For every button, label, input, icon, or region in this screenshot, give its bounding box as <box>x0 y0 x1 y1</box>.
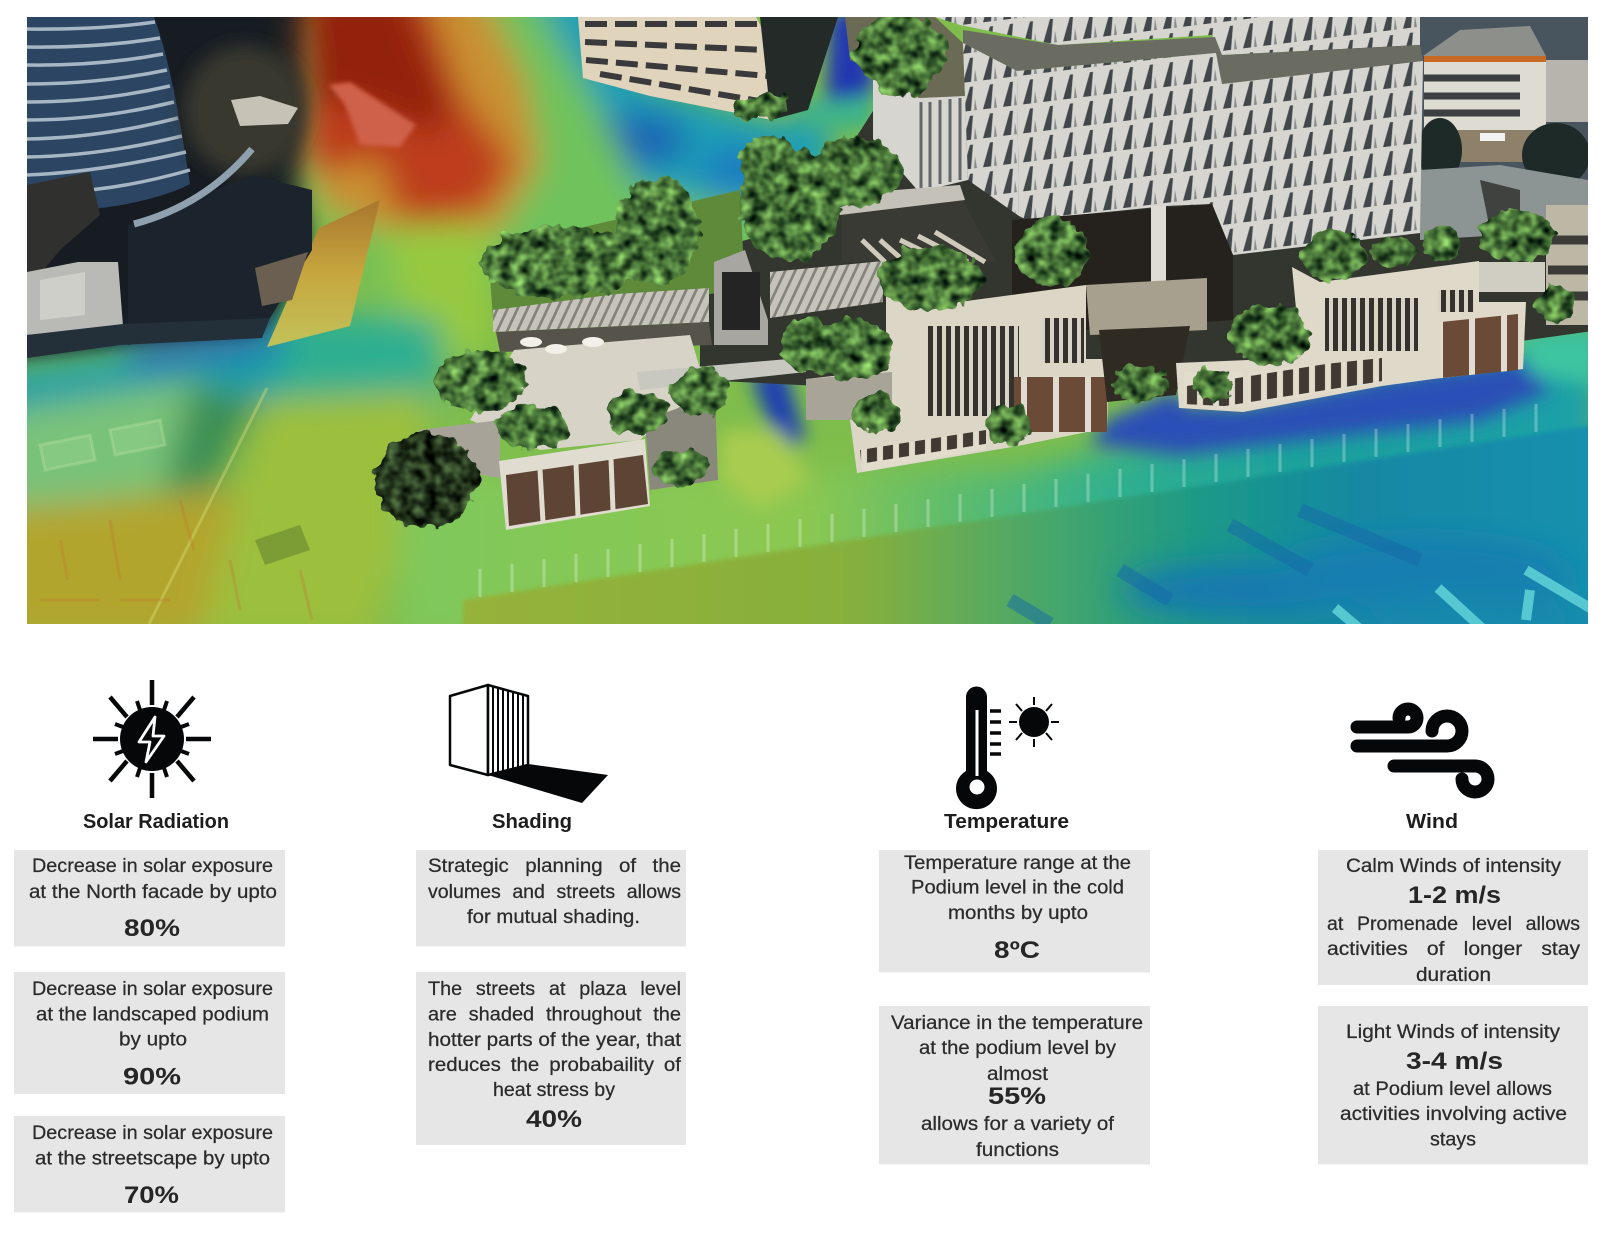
pergola centre <box>770 261 883 318</box>
bright road markings bottom right <box>1335 570 1590 630</box>
card: light winds 3-4 m/s: activities involving active <box>1340 1104 1567 1125</box>
icon: wind gusts <box>1357 709 1488 792</box>
window rows of cream building <box>585 24 768 102</box>
card: mutual shading: volumes and streets allows <box>428 882 681 903</box>
white box building <box>27 262 123 335</box>
dark backdrop behind podium <box>700 45 1588 390</box>
dark terrace left <box>645 395 718 490</box>
heat map base on ground <box>27 17 1588 624</box>
tower left wing <box>873 80 968 188</box>
canopy <box>134 149 252 224</box>
white box roof <box>40 272 85 320</box>
dark strip below left building <box>27 318 270 358</box>
card: calm winds 1-2 m/s <box>1318 850 1588 986</box>
pink pavilion under heat <box>329 82 416 147</box>
stairs <box>842 195 996 262</box>
icon: thermometer and sun <box>956 686 1059 809</box>
card: north facade 80% <box>14 850 285 946</box>
card: temperature range 8°C <box>879 850 1150 972</box>
card: landscaped podium 90% <box>14 972 285 1094</box>
card: light winds 3-4 m/s: Light Winds of intensity <box>1346 1022 1561 1043</box>
dark building top centre <box>760 17 838 120</box>
card: heat stress 40%: are shaded throughout the <box>428 1004 681 1026</box>
card: temperature range 8°C: Temperature range at the <box>904 853 1131 874</box>
fence posts <box>480 404 1536 597</box>
card: light winds 3-4 m/s: 3-4 m/s <box>1406 1048 1503 1075</box>
tower upper band <box>935 17 1420 55</box>
card: heat stress 40%: heat stress by <box>493 1080 616 1101</box>
trees behind pavilion <box>183 45 307 175</box>
card: mutual shading: Strategic planning of the <box>428 856 681 877</box>
card: north facade 80%: at the North facade by upto <box>29 882 277 903</box>
small pavilion <box>231 96 298 126</box>
heading: Solar Radiation: Solar Radiation <box>83 811 229 833</box>
icon: building casting shadow <box>450 685 608 803</box>
card: landscaped podium 90%: 90% <box>123 1064 181 1090</box>
card: heat stress 40%: 40% <box>526 1106 582 1133</box>
card: temperature range 8°C: 8ºC <box>994 937 1040 964</box>
bridge <box>267 200 380 347</box>
card: calm winds 1-2 m/s: duration <box>1416 965 1491 986</box>
card: temperature variance 55%: at the podium level by <box>919 1038 1117 1059</box>
column <box>1151 206 1166 282</box>
card: landscaped podium 90%: Decrease in solar exposure <box>32 979 273 1000</box>
ground detail lower left <box>40 388 312 624</box>
card: north facade 80%: Decrease in solar exposure <box>32 856 273 877</box>
card: streetscape 70%: at the streetscape by upto <box>35 1148 270 1170</box>
aerial photo with thermal heat map overlay <box>0 0 1600 646</box>
umbrellas <box>520 337 604 354</box>
card: calm winds 1-2 m/s: activities of longer stay <box>1327 939 1581 960</box>
dirt patch <box>255 252 308 306</box>
grass under hedges <box>488 190 745 318</box>
deep blue patches <box>1114 544 1562 624</box>
walkway <box>637 358 806 390</box>
heading: Shading: Shading <box>492 811 572 833</box>
rooftop base <box>845 17 965 98</box>
card: streetscape 70%: Decrease in solar exposure <box>32 1123 273 1144</box>
left white block with brown windows <box>499 439 650 530</box>
dark low building <box>128 175 312 345</box>
cream building at top <box>578 17 772 120</box>
tower side face <box>963 43 1019 216</box>
card: temperature range 8°C: Podium level in the cold <box>911 878 1124 898</box>
card: heat stress 40%: The streets at plaza level <box>428 979 681 1000</box>
roof terrace under upper band <box>963 30 1423 84</box>
left roof blocks <box>27 172 100 272</box>
dark shrub at left corner <box>374 433 478 527</box>
card: temperature range 8°C: months by upto <box>948 903 1088 924</box>
card: temperature variance 55%: almost <box>987 1064 1049 1085</box>
shaded ground beyond fence line <box>463 424 1600 640</box>
dark city blocks at upper left <box>0 0 310 365</box>
column: Temperature <box>879 686 1150 1164</box>
railing <box>832 185 965 215</box>
column: Shading <box>416 685 686 1145</box>
card: streetscape 70%: 70% <box>124 1182 179 1209</box>
heading: Wind: Wind <box>1406 811 1458 833</box>
middle podium block <box>806 277 1109 473</box>
card: temperature variance 55%: allows for a variety of <box>921 1114 1115 1135</box>
card: heat stress 40%: hotter parts of the year, that <box>428 1030 682 1051</box>
card: calm winds 1-2 m/s: at Promenade level allows <box>1327 914 1580 935</box>
card: streetscape 70% <box>14 1116 285 1212</box>
plaza under tower <box>1086 278 1207 335</box>
heading: Temperature: Temperature <box>944 811 1069 833</box>
main tower facade <box>1017 53 1423 255</box>
card: calm winds 1-2 m/s: Calm Winds of intensity <box>1346 856 1562 877</box>
dark underside of tower <box>1012 204 1233 330</box>
card: heat stress 40%: reduces the probabaility of <box>428 1055 682 1076</box>
card: landscaped podium 90%: by upto <box>119 1030 187 1050</box>
trees <box>434 16 1575 486</box>
card: temperature variance 55% <box>879 1006 1150 1164</box>
deep blue streaks bottom <box>1010 510 1420 624</box>
card: temperature variance 55%: 55% <box>988 1083 1046 1110</box>
card: north facade 80%: 80% <box>124 915 180 942</box>
card: landscaped podium 90%: at the landscaped podium <box>36 1004 269 1026</box>
wing window lines <box>921 98 960 190</box>
card: light winds 3-4 m/s: at Podium level allows <box>1353 1079 1552 1100</box>
right hand background buildings <box>1418 17 1590 325</box>
fence block left <box>419 420 500 478</box>
card: temperature variance 55%: functions <box>976 1140 1059 1161</box>
card: mutual shading <box>416 850 686 946</box>
column: Wind <box>1318 709 1588 1164</box>
card: light winds 3-4 m/s <box>1318 1006 1588 1164</box>
curved glass tower <box>27 17 190 225</box>
gap below plaza <box>1099 326 1190 402</box>
icon: sun with lightning bolt <box>93 680 211 798</box>
plaza deck <box>470 335 705 450</box>
dark strip below pergola <box>496 322 712 352</box>
entrance void <box>714 250 768 345</box>
card: heat stress 40% <box>416 972 686 1145</box>
heat at the riverside edge of podium <box>720 10 1600 510</box>
blurred thermal field <box>0 0 1600 640</box>
card: mutual shading: for mutual shading. <box>467 907 640 928</box>
card: temperature variance 55%: Variance in the temperature <box>891 1013 1143 1034</box>
right podium block <box>1176 261 1545 412</box>
card: light winds 3-4 m/s: stays <box>1430 1130 1476 1150</box>
card: calm winds 1-2 m/s: 1-2 m/s <box>1408 882 1501 909</box>
column: Solar Radiation <box>14 680 285 1212</box>
pergola left <box>493 288 709 332</box>
stair lines <box>862 232 985 262</box>
dark entrance <box>722 272 760 330</box>
